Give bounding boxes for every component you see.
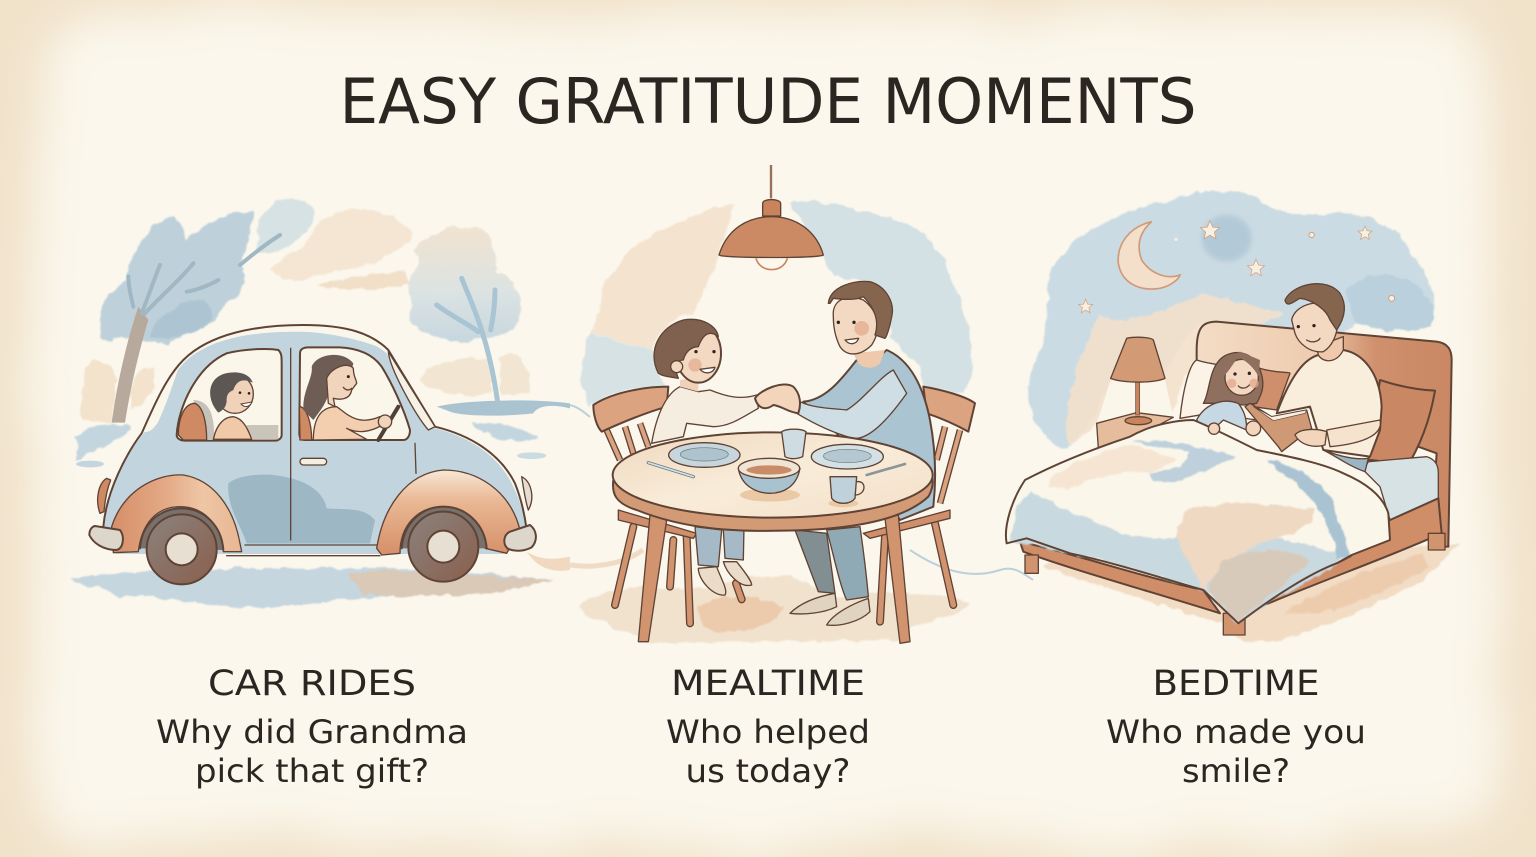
label: car rides xyxy=(156,664,468,790)
open book with hands xyxy=(1208,403,1327,452)
front window xyxy=(299,347,410,440)
car body xyxy=(103,332,527,554)
label: mealtime: MEALTIME xyxy=(671,664,865,704)
label: car rides: pick that gift? xyxy=(195,752,429,790)
title: EASY GRATITUDE MOMENTS xyxy=(340,65,1196,138)
label: car rides: Why did Grandma xyxy=(156,713,468,751)
door lines xyxy=(227,348,416,556)
illustration: bedtime xyxy=(1006,191,1460,642)
pendant lamp xyxy=(719,165,823,270)
label: bedtime: smile? xyxy=(1182,752,1290,790)
left chair xyxy=(593,387,742,623)
label: mealtime xyxy=(666,664,870,790)
table xyxy=(613,432,933,643)
scenery: trees and ground xyxy=(70,199,570,608)
rear window xyxy=(177,349,282,441)
front fender xyxy=(377,470,520,555)
blanket xyxy=(1006,420,1390,623)
man xyxy=(790,281,935,625)
stars xyxy=(1079,221,1395,313)
right chair xyxy=(863,387,975,622)
daughter xyxy=(1197,352,1263,430)
front wheel xyxy=(402,507,487,582)
windscreen strip xyxy=(388,352,435,430)
connecting ribbons xyxy=(570,405,1033,580)
pillows xyxy=(1180,360,1435,470)
label: mealtime: us today? xyxy=(686,752,850,790)
car outline xyxy=(103,325,527,530)
illustration: mealtime xyxy=(580,165,975,643)
rear lamp xyxy=(98,478,111,513)
lamp glow xyxy=(1097,380,1173,423)
father xyxy=(1277,284,1382,472)
illustration: car rides xyxy=(70,199,570,608)
label: mealtime: Who helped xyxy=(666,713,870,751)
night sky wash xyxy=(1028,191,1460,642)
mattress xyxy=(1363,457,1438,520)
label: bedtime xyxy=(1106,664,1366,790)
moon xyxy=(1118,222,1180,289)
rear quarter highlight xyxy=(142,363,180,432)
bed frame xyxy=(1020,498,1445,635)
rear wheel xyxy=(140,508,223,584)
headboard xyxy=(1197,322,1452,547)
rear fender xyxy=(112,475,242,553)
label: bedtime: BEDTIME xyxy=(1152,664,1320,704)
label: bedtime: Who made you xyxy=(1106,713,1366,751)
rear bumper xyxy=(89,526,123,550)
woman driver xyxy=(299,355,398,440)
door handle xyxy=(300,458,327,465)
front lamp xyxy=(522,477,532,510)
front bumper xyxy=(504,525,536,551)
label: car rides: CAR RIDES xyxy=(208,664,416,704)
roof highlight xyxy=(187,325,387,360)
nightstand xyxy=(1097,413,1173,448)
watercolor washes xyxy=(580,201,972,643)
clasped hands xyxy=(755,384,800,413)
tableware xyxy=(648,429,905,507)
table lamp xyxy=(1111,337,1165,425)
boy xyxy=(652,319,758,595)
body paint patch xyxy=(228,475,375,543)
boy passenger xyxy=(178,372,278,440)
